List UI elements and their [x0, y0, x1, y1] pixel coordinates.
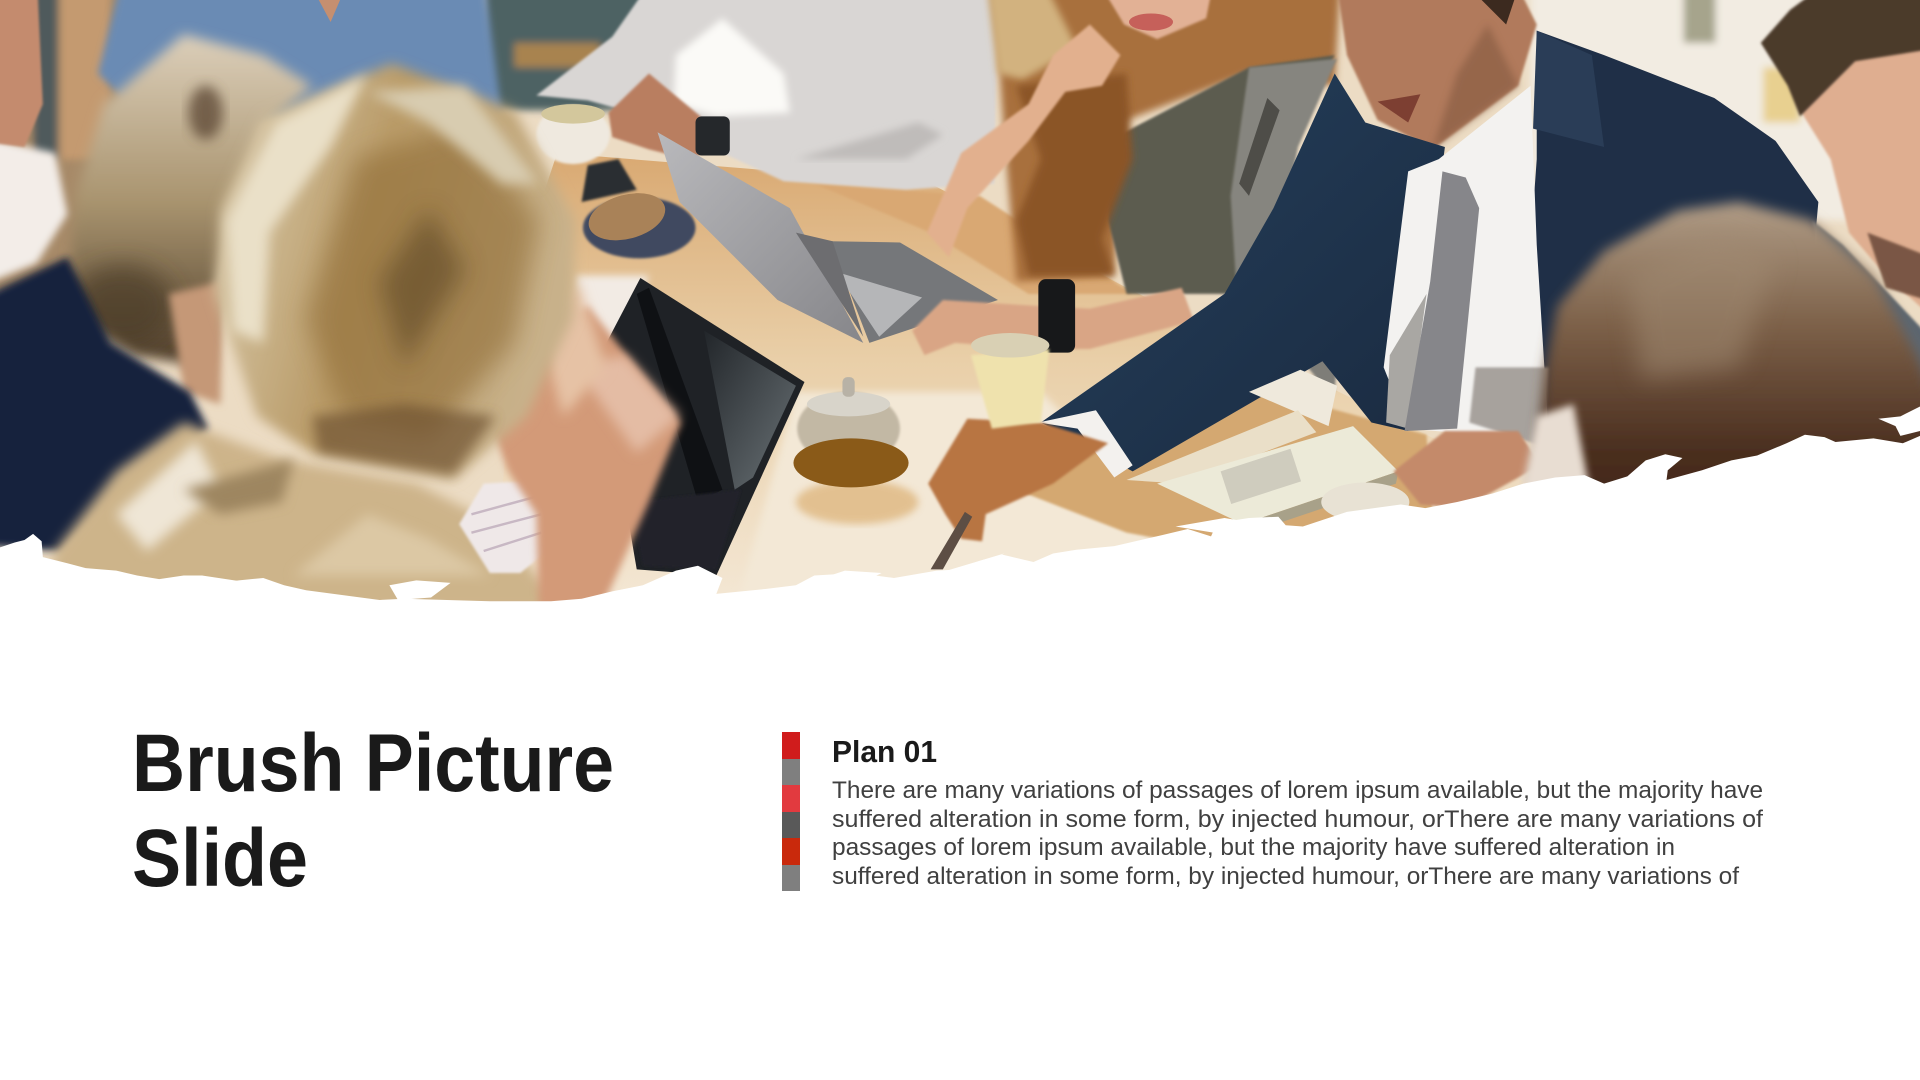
title: Brush Picture Slide: Brush Picture: [132, 718, 614, 809]
photo: team meeting around a table with brush-torn lower edge: [0, 0, 1920, 602]
woman: [989, 0, 1341, 282]
body text: There are many variations of passages of lorem ipsum available, but the majority have: [832, 777, 1763, 804]
notebook: [1127, 410, 1316, 484]
background: [0, 0, 1920, 294]
brush edge: white torn mask: [0, 407, 1920, 1080]
title: Brush Picture Slide: Slide: [132, 813, 308, 904]
plate: [583, 197, 696, 258]
front person: [43, 422, 569, 612]
tablet: [600, 278, 804, 576]
laptop: [658, 132, 863, 343]
table: [547, 156, 1434, 594]
body text: suffered alteration in some form, by injected humour, orThere are many variations of: [832, 863, 1739, 890]
accent bar: stacked red and grey segments: [782, 732, 800, 891]
heading: Plan 01: Plan 01: [832, 734, 937, 769]
body text: suffered alteration in some form, by injected humour, orThere are many variations of: [832, 806, 1763, 833]
title: Brush Picture Slide: [132, 718, 614, 904]
right man and brown head foreground: [1802, 50, 1920, 308]
body text: passages of lorem ipsum available, but the majority have suffered alteration in: [832, 834, 1675, 861]
shirts top: [98, 0, 502, 122]
glass and teapot: [971, 349, 1049, 429]
text block: Plan 01 heading and body: [832, 734, 1763, 890]
man in suit: [1337, 0, 1537, 149]
body text: [832, 777, 1763, 890]
keyboard: [459, 480, 547, 573]
left people: [67, 34, 312, 367]
hands on table: [1393, 431, 1540, 508]
